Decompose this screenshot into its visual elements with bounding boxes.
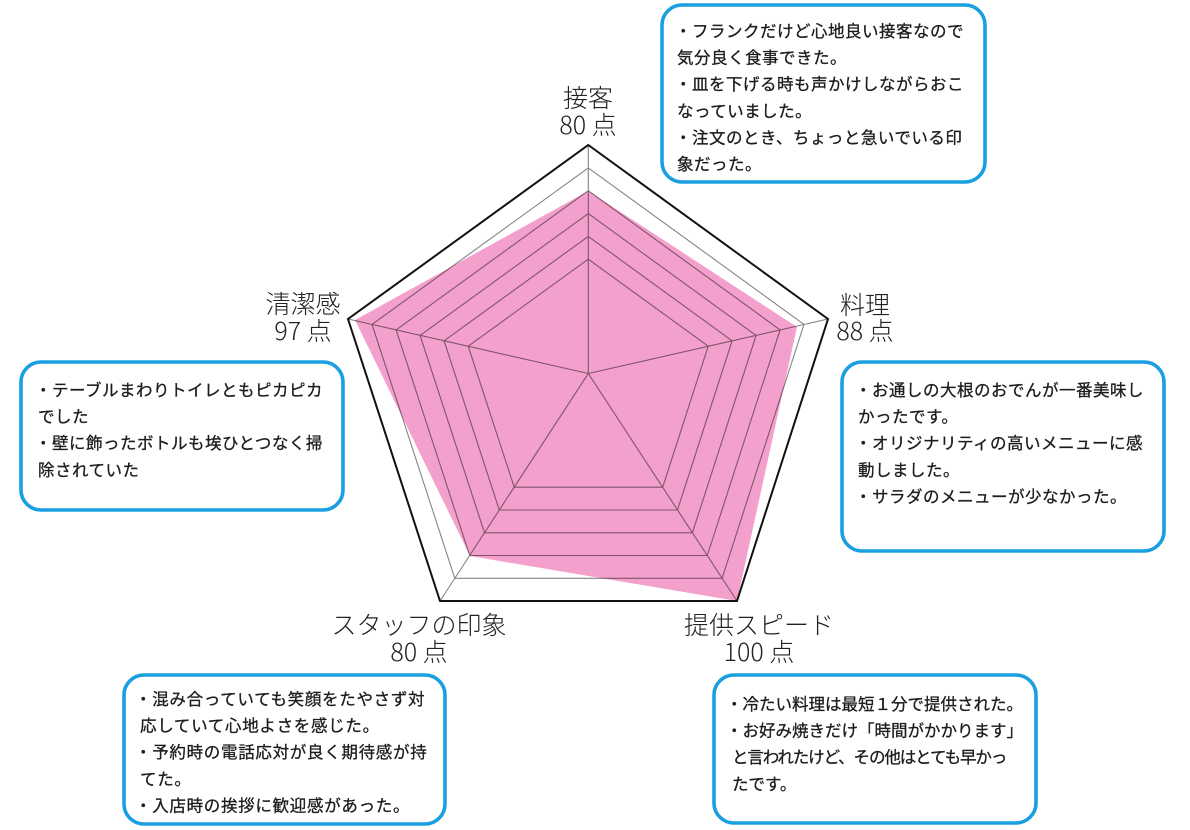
label: 提供スピード: [684, 606, 834, 669]
data area: [355, 191, 797, 601]
comment box: スタッフの印象: ・予約時の電話応対が良く期待感が持: [135, 743, 427, 762]
radar grid: [348, 145, 828, 601]
comment box: 清潔感: でした: [38, 408, 89, 427]
comment box: 提供スピード: ・お好み焼きだけ「時間がかかります」: [726, 722, 1023, 741]
label: 料理: 料理: [840, 286, 890, 322]
outer pentagon: [348, 145, 828, 601]
comment box: 接客: ・皿を下げる時も声かけしながらおこ: [675, 75, 964, 94]
radar chart: [348, 145, 828, 601]
comment box: 料理: 動しました。: [858, 461, 960, 480]
label: 提供スピード: 100 点: [724, 633, 794, 669]
comment box: スタッフの印象: 応していて心地よさを感じた。: [140, 717, 380, 736]
comment box: 提供スピード: と言われたけど、その他はとても早かっ: [732, 748, 1006, 767]
label: スタッフの印象: スタッフの印象: [331, 606, 507, 642]
label: 清潔感: 清潔感: [265, 285, 341, 321]
label: 料理: [836, 286, 894, 348]
comment box: 清潔感: ・壁に飾ったボトルも埃ひとつなく掃: [35, 434, 323, 453]
comment box: 接客: ・注文のとき、ちょっと急いでいる印: [675, 128, 962, 147]
comment box: 接客: なっていました。: [677, 102, 812, 121]
label: 接客: [559, 79, 617, 142]
label: 清潔感: 97 点: [274, 312, 332, 348]
label: 接客: 接客: [563, 79, 613, 115]
comment box: 料理: かったです。: [858, 408, 958, 427]
label: 提供スピード: 提供スピード: [684, 606, 834, 642]
label: 清潔感: [265, 285, 341, 348]
comment box: 清潔感: 除されていた: [38, 461, 140, 480]
label: スタッフの印象: [331, 606, 507, 669]
comment box: 料理: ・サラダのメニューが少なかった。: [855, 487, 1127, 506]
comment box: スタッフの印象: [124, 675, 445, 824]
comment box: 提供スピード: [714, 675, 1036, 823]
comment box: 料理: ・お通しの大根のおでんが一番美味し: [855, 381, 1144, 400]
comment box: スタッフの印象: ・混み合っていても笑顔をたやさず対: [135, 690, 425, 709]
comment box: 提供スピード: ・冷たい料理は最短１分で提供された。: [726, 695, 1023, 714]
label: スタッフの印象: 80 点: [390, 633, 448, 669]
comment box: スタッフの印象: ・入店時の挨拶に歓迎感があった。: [135, 796, 410, 815]
comment box: 接客: ・フランクだけど心地良い接客なので: [675, 22, 964, 41]
comment box: 清潔感: ・テーブルまわりトイレともピカピカ: [35, 380, 323, 400]
comment box: 接客: 象だった。: [677, 155, 762, 174]
comment box: 接客: [662, 5, 985, 182]
label: 料理: 88 点: [836, 312, 894, 348]
comment box: 清潔感: [21, 362, 343, 510]
label: 接客: 80 点: [559, 106, 617, 142]
comment box: 提供スピード: たです。: [732, 775, 796, 794]
comment box: スタッフの印象: てた。: [140, 770, 192, 789]
comment box: 料理: [842, 362, 1164, 551]
comment box: 接客: 気分良く食事できた。: [677, 49, 847, 68]
comment box: 料理: ・オリジナリティの高いメニューに感: [855, 434, 1143, 453]
